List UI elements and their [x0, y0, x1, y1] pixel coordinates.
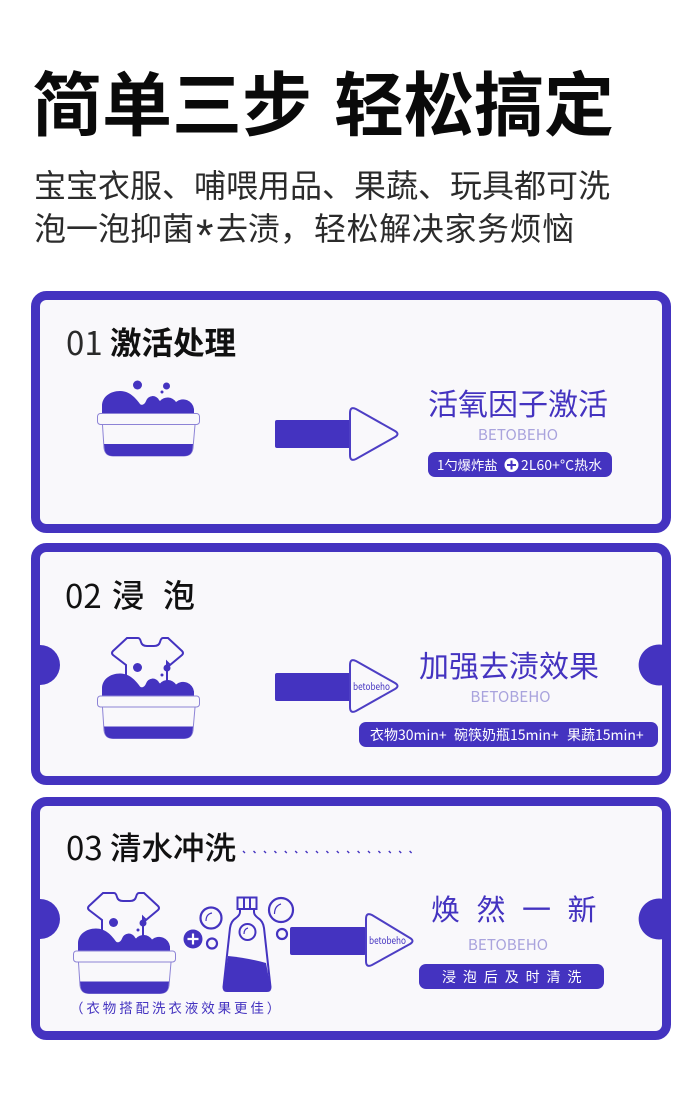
- heading: 01: 01: [66, 317, 103, 365]
- pill: dosage: 1勺爆炸盐: [437, 455, 498, 474]
- arrow: betobeho: [353, 678, 390, 693]
- heading: 02: 泡: [163, 571, 195, 617]
- notch left: [40, 645, 60, 685]
- subtitle text: 轻松解决家务烦恼: [314, 204, 575, 250]
- icon: plus: [184, 930, 202, 948]
- icon: detergent bottle with bubbles: [200, 898, 293, 991]
- result heading: 活氧因子激活: [428, 380, 608, 424]
- subtitle text: 去渍，: [216, 204, 312, 250]
- panel: step 02: [36, 548, 666, 780]
- heading: 02: [65, 570, 195, 618]
- subtitle text: 泡一泡抑菌: [34, 204, 194, 250]
- icon: shirt in basin: [74, 893, 176, 994]
- brand label: BETOBEHO: [468, 933, 548, 955]
- arrow: betobeho: [369, 932, 406, 947]
- result heading: 焕然一新: [431, 887, 613, 929]
- pill: soak times: 碗筷奶瓶15min+: [454, 725, 559, 745]
- brand label: BETOBEHO: [478, 423, 558, 445]
- icon: shirt in basin: [98, 638, 200, 738]
- pill: soak times: 果蔬15min+: [567, 725, 644, 745]
- notch right: [639, 644, 662, 686]
- heading: 02: 浸: [112, 571, 144, 617]
- title: 简单三步: [32, 50, 312, 151]
- notch left: [40, 899, 60, 939]
- pill: dosage: [428, 452, 612, 477]
- subtitle text: *: [196, 210, 214, 261]
- panel: step 03: [36, 802, 666, 1036]
- heading: 03: 03: [66, 822, 103, 870]
- panel: step 01: [36, 296, 666, 528]
- arrow: [290, 914, 412, 966]
- brand label: BETOBEHO: [470, 685, 551, 707]
- notch right: [639, 898, 662, 940]
- result heading: 加强去渍效果: [419, 642, 599, 686]
- title: 轻松搞定: [334, 50, 614, 151]
- pill: rinse note: 浸泡后及时清洗: [442, 967, 588, 987]
- arrow: [275, 408, 398, 460]
- heading: 03: 清水冲洗: [110, 823, 236, 869]
- pill: rinse note: [419, 964, 604, 989]
- icon: wash basin with foam: [98, 380, 200, 456]
- pill: soak times: [359, 722, 658, 747]
- heading: 02: 02: [65, 570, 102, 618]
- subtitle text: 宝宝衣服、哺喂用品、果蔬、玩具都可洗: [34, 161, 610, 207]
- dotted accent: [243, 851, 412, 853]
- pill: dosage: 2L60+°C热水: [521, 454, 602, 474]
- heading: 01: 激活处理: [110, 318, 236, 364]
- pill: soak times: 衣物30min+: [370, 725, 447, 745]
- title: [32, 50, 614, 151]
- arrow: [275, 660, 398, 712]
- caption: （衣物搭配洗衣液效果更佳）: [70, 997, 283, 1017]
- subtitle text: [34, 161, 610, 261]
